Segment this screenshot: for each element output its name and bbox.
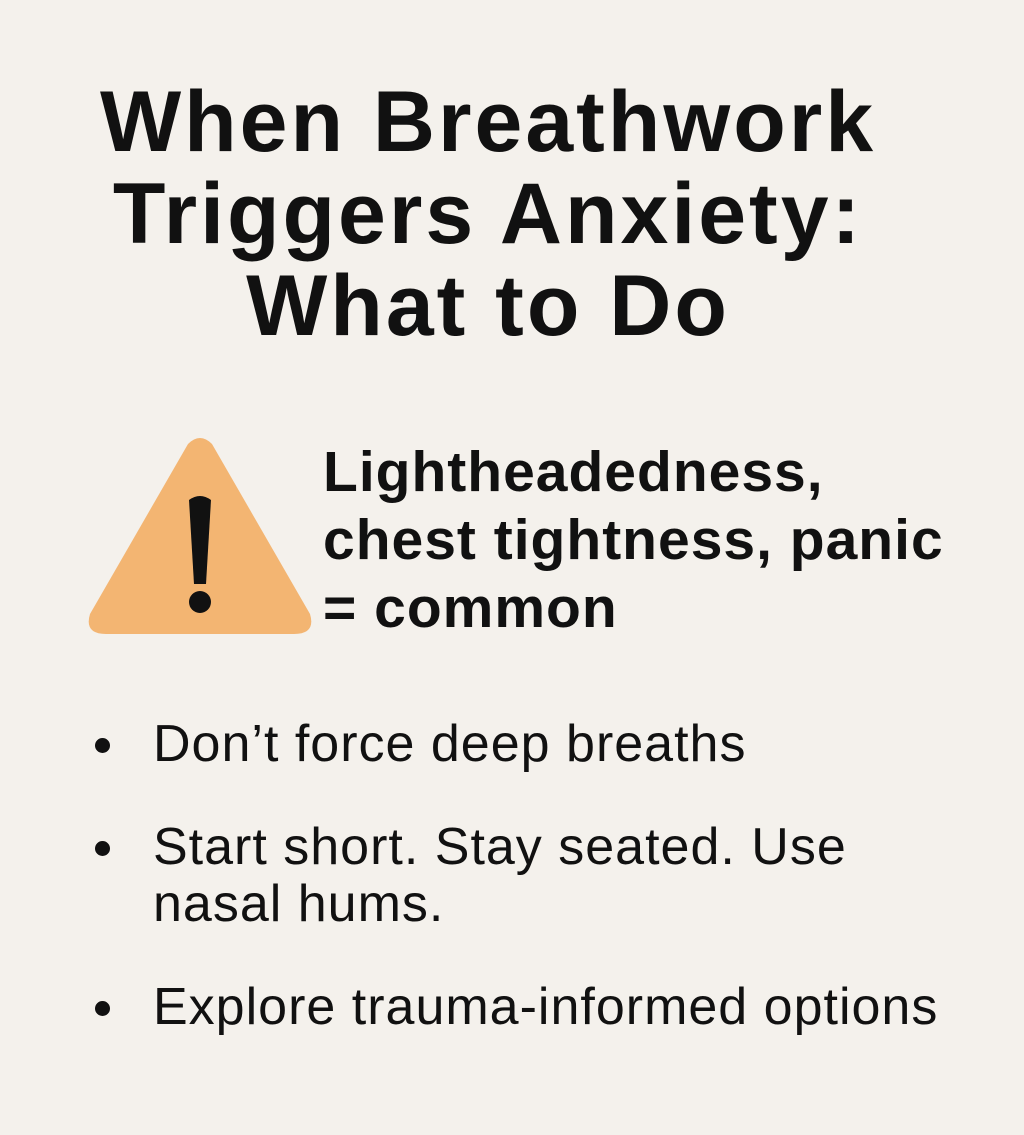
title: What to Do [246, 258, 730, 354]
bullet list [95, 715, 938, 1036]
title [100, 74, 876, 354]
warning text: chest tightness, panic [323, 508, 944, 572]
bullet 2: Start short. Stay seated. Use [153, 818, 847, 876]
warning text [323, 440, 944, 640]
warning text: = common [323, 576, 618, 640]
icon: warning triangle [88, 438, 312, 634]
bullet 3: Explore trauma-informed options [153, 978, 938, 1036]
bullet 2: nasal hums. [153, 875, 444, 933]
title: When Breathwork [100, 74, 876, 170]
bullet 1: Don’t force deep breaths [153, 715, 746, 773]
title: Triggers Anxiety: [113, 166, 863, 262]
warning text: Lightheadedness, [323, 440, 824, 504]
bullet 2 [90, 819, 938, 933]
